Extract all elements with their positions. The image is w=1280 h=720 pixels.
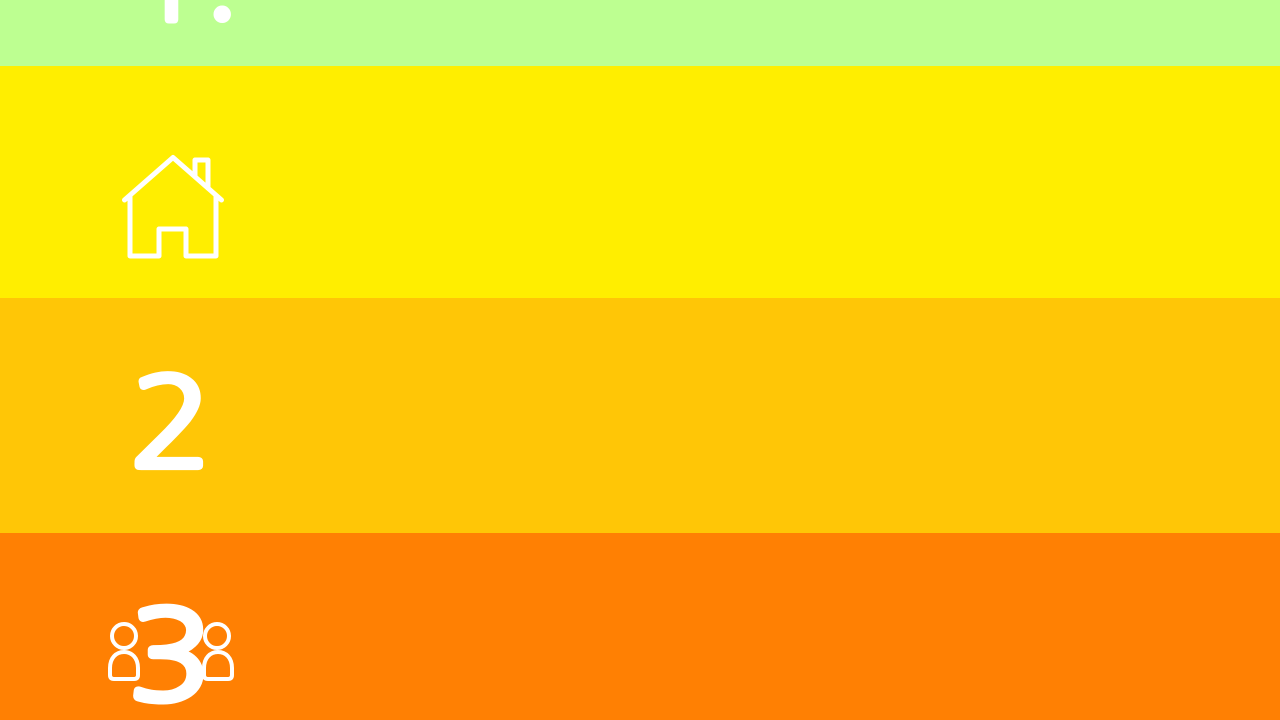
icon: house xyxy=(124,158,222,256)
panel: green band, step 1 xyxy=(0,0,1280,66)
step number 2: 2 xyxy=(129,361,213,485)
panel: yellow band with house icon xyxy=(0,66,1280,298)
panel: orange band, step 3 with people icon xyxy=(0,533,1280,720)
icon: two people xyxy=(110,624,232,679)
step number 3: 3 xyxy=(128,594,212,718)
